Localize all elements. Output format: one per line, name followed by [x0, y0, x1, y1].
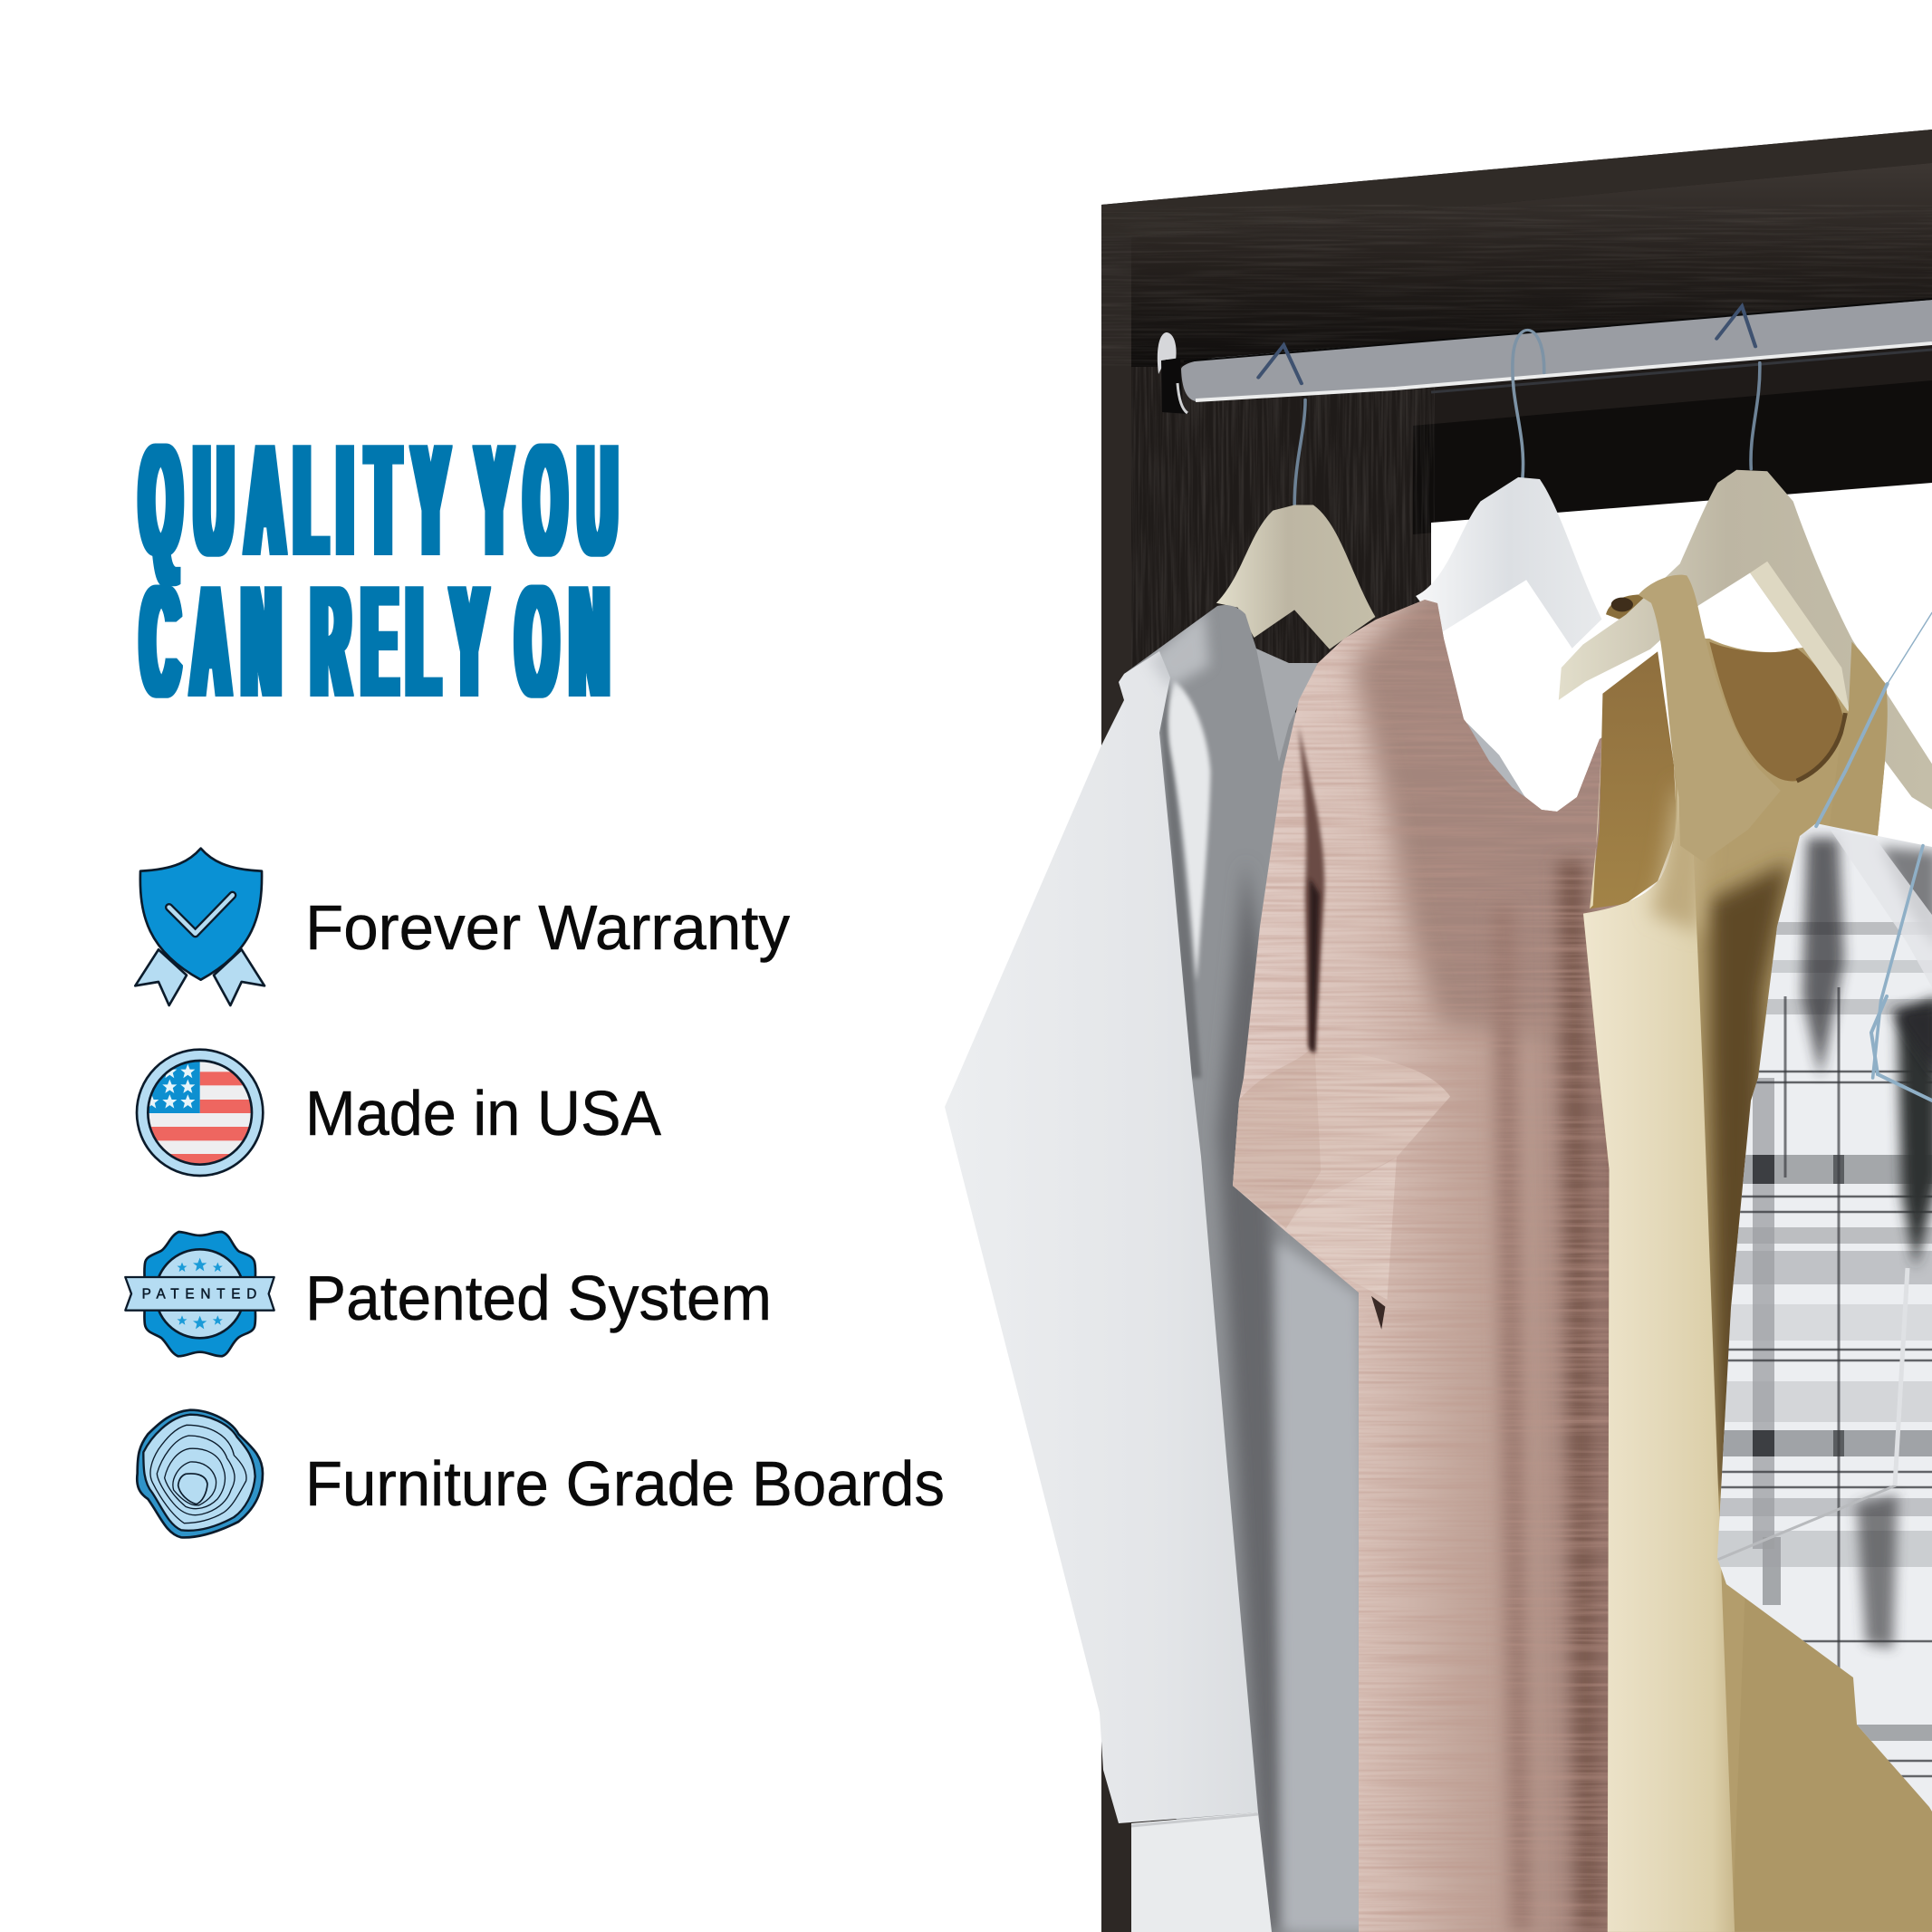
icon: warranty shield: [135, 849, 264, 1005]
title line 2: CAN RELY ON: [141, 554, 608, 730]
hanger: right beige: [1559, 470, 1932, 810]
collar highlight fold: [1168, 680, 1210, 982]
dark strap spot: [1611, 598, 1633, 611]
dark sleeve fold: [1299, 726, 1324, 1054]
plaid fold edge: [1717, 1485, 1896, 1560]
tank top neck interior: [1709, 642, 1843, 781]
plaid dark folds: [1802, 838, 1844, 1078]
label: Furniture Grade Boards: Furniture Grade Boards: [305, 1448, 945, 1519]
label: Patented System: Patented System: [305, 1263, 772, 1333]
photo: wardrobe with hanging clothes: [945, 130, 1932, 1932]
garment: gold tank top: [1583, 639, 1932, 1932]
garment: plaid shirt: [1703, 815, 1932, 1821]
gold behind hanger tip: [1606, 595, 1651, 620]
icon: USA flag badge: [137, 1050, 263, 1176]
title line 1: QUALITY YOU: [140, 413, 616, 589]
icon: patented seal: [125, 1232, 274, 1356]
wardrobe frame: [1101, 130, 1932, 1932]
pink sleeve roll folds: [1233, 1043, 1450, 1300]
garment: white and grey shirt: [945, 605, 1377, 1932]
title: [140, 413, 616, 730]
label: Forever Warranty: Forever Warranty: [305, 892, 790, 963]
garment: pink t-shirt: [1214, 589, 1630, 1932]
tank top dark side shading: [1709, 861, 1791, 1493]
icon: patented seal: PATENTED: [142, 1287, 256, 1302]
feature list: [125, 849, 945, 1537]
sleeve: [945, 651, 1258, 1823]
tank top left armhole interior: [1590, 651, 1677, 908]
cream fade into gold: [1651, 781, 1706, 933]
hanger: left beige: [1216, 505, 1375, 649]
wire hanger over plaid: [1816, 612, 1932, 1101]
lower shirt body: [1131, 1812, 1272, 1932]
icon: wood rings: [137, 1410, 263, 1537]
pink fold shadow: [1371, 1296, 1385, 1330]
white opening behind clothes: [1431, 483, 1932, 1932]
shoulder grey shading: [1149, 609, 1209, 688]
hanger hooks: [1258, 306, 1760, 506]
label: Made in USA: Made in USA: [305, 1078, 661, 1149]
hanger: middle white: [1416, 477, 1601, 649]
neckline grey sliver: [1466, 723, 1525, 797]
plaid bands: [1703, 922, 1932, 1741]
armhole light edge: [1590, 735, 1602, 908]
hanging rail: [1158, 299, 1932, 414]
tank top cream front: [1583, 781, 1735, 1932]
tank top strap and shoulder: [1639, 575, 1888, 861]
hanger cream edge: [1750, 562, 1850, 714]
collar shadow: [1161, 680, 1201, 1078]
